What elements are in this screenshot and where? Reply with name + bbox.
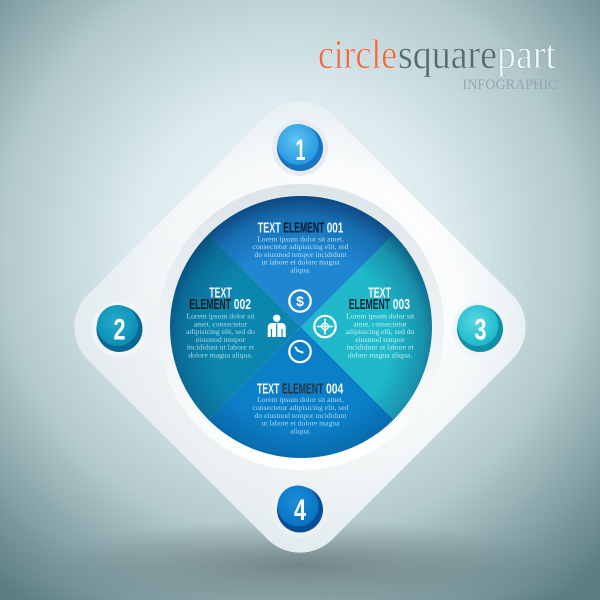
number badge 2: 2 — [114, 314, 126, 346]
number badge 1 — [272, 120, 328, 176]
subtitle: INFOGRAPHIC — [462, 77, 558, 93]
sector: top — [208, 196, 394, 327]
text block 003 — [346, 285, 415, 360]
text block 003: eiusmod tempor — [355, 335, 405, 344]
text block 002: incididunt ut labore et — [187, 343, 255, 352]
text block 002: Lorem ipsum dolor sit — [186, 312, 255, 320]
text block 001 — [253, 220, 349, 274]
text block 001: ELEMENT — [283, 220, 324, 236]
circle inner shadow — [170, 196, 432, 458]
title: part — [497, 31, 557, 77]
text block 001: 001 — [327, 220, 343, 236]
text block 003: Lorem ipsum dolor sit — [346, 312, 415, 320]
icon: crosshair — [314, 316, 336, 337]
icon: dollar coin — [289, 290, 311, 312]
text block 001: ut labore et dolore magna — [261, 258, 340, 267]
circle ring — [158, 184, 444, 470]
icon: clock — [289, 341, 311, 362]
floor shadow — [50, 519, 550, 600]
text block 003: adipisicing elit, sed do — [346, 327, 415, 336]
text block 004: ELEMENT — [282, 380, 323, 397]
text block 002: adipisicing elit, sed do — [186, 327, 255, 336]
text block 004: aliqua. — [290, 426, 311, 436]
text block 004: 004 — [326, 380, 344, 397]
title: square — [398, 31, 497, 77]
panel: quartered circle — [170, 196, 432, 458]
sector: right — [301, 234, 432, 420]
text block 004: do eiusmod tempor incididunt — [255, 411, 347, 420]
text block 001: TEXT — [258, 220, 281, 236]
text block 004: consectetur adipisicing elit, sed — [253, 403, 349, 412]
number badge 2 — [92, 301, 148, 357]
text block 001: Lorem ipsum dolor sit amet, — [257, 234, 344, 244]
text block 004: TEXT — [257, 380, 279, 397]
text block 003: 003 — [393, 296, 410, 313]
sector: left — [170, 234, 301, 420]
text block 004 — [253, 380, 349, 436]
title: circle — [318, 31, 397, 77]
text block 002: dolore magna aliqua. — [188, 350, 253, 360]
number badge 3: 3 — [474, 314, 486, 346]
text block 002 — [186, 285, 255, 360]
text block 003: amet, consectetur — [353, 319, 407, 328]
text block 003: dolore magna aliqua. — [348, 350, 412, 360]
title — [318, 31, 557, 77]
number badge 1: 1 — [296, 134, 306, 167]
text block 002: eiusmod tempor — [196, 335, 246, 344]
text block 004: Lorem ipsum dolor sit amet, — [257, 395, 344, 404]
text block 001: aliqua. — [290, 265, 311, 274]
text block 002: amet, consectetur — [194, 319, 248, 328]
number badge 3 — [452, 301, 508, 357]
icon: dollar coin: $ — [296, 293, 304, 309]
icon: person — [268, 315, 286, 337]
text block 003: ELEMENT — [349, 296, 390, 313]
text block 001: do eiusmod tempor incididunt — [255, 250, 347, 259]
number badge 4: 4 — [294, 494, 306, 527]
sector: bottom — [208, 327, 394, 458]
text block 002: 002 — [234, 296, 251, 313]
text block 001: consectetur adipisicing elit, sed — [253, 242, 349, 251]
text block 003: TEXT — [368, 285, 391, 302]
text block 002: TEXT — [209, 285, 232, 302]
white rounded diamond — [55, 82, 545, 572]
number badge 4 — [272, 482, 328, 538]
text block 002: ELEMENT — [189, 296, 231, 313]
text block 004: ut labore et dolore magna — [261, 418, 340, 428]
text block 003: incididunt ut labore et — [346, 343, 415, 352]
